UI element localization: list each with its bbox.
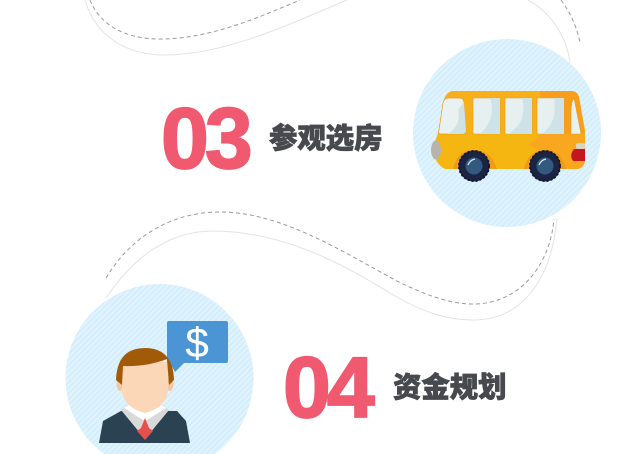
- bus front wheel: [458, 150, 490, 182]
- number 04: 04: [283, 340, 375, 436]
- step 03: bus panel: [161, 39, 601, 227]
- suit: [99, 411, 190, 443]
- number 03: 03: [161, 91, 250, 187]
- bus headlight: [431, 140, 441, 160]
- bus window 2: [505, 98, 532, 134]
- bus windscreen: [439, 98, 466, 134]
- face: [122, 362, 168, 413]
- tie: [137, 418, 153, 440]
- icon: yellow bus: [431, 91, 585, 182]
- heading: 参观选房: 参观选房: [269, 122, 383, 155]
- connector: top solid curve: [85, 0, 347, 55]
- bus rear window: [571, 98, 581, 134]
- collar: [121, 403, 169, 433]
- circle background: bus: [413, 39, 601, 227]
- bus window 3: [537, 98, 564, 134]
- bus window 1: [473, 98, 500, 134]
- icon: speech bubble with dollar: $: [185, 319, 209, 366]
- connector: top dashed curve: [90, 0, 300, 39]
- connector: middle solid curve: [106, 218, 557, 320]
- step 04: advisor panel: [66, 284, 507, 454]
- heading: 资金规划: 资金规划: [393, 371, 507, 404]
- ears: [116, 377, 124, 391]
- circle background: advisor: [66, 284, 254, 454]
- bus rear wheel: [530, 150, 560, 182]
- icon: businessman: [99, 348, 190, 443]
- connector: top right dashed curve: [561, 0, 580, 42]
- hair: [116, 348, 174, 385]
- icon: speech bubble with dollar: [167, 319, 228, 372]
- connector: middle dashed curve: [106, 212, 554, 304]
- bus tail light: [571, 149, 585, 161]
- connector: top right solid curve: [528, 0, 570, 62]
